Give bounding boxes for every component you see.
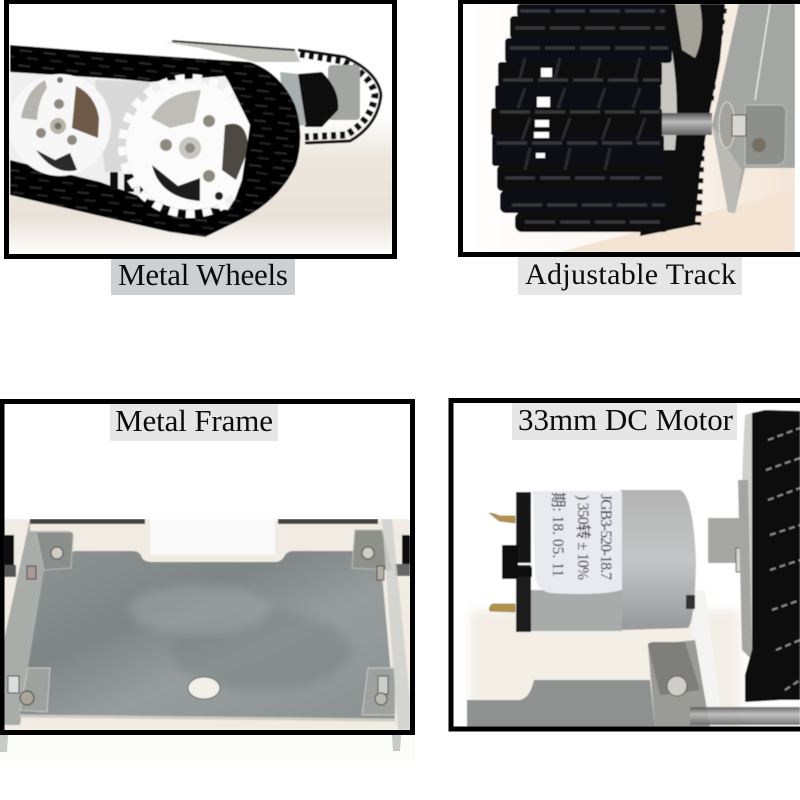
washer and bolt <box>719 102 735 148</box>
hole in plate <box>188 677 220 699</box>
motor sticker text: 期: 18. 05. 11 <box>549 492 567 577</box>
bottom track teeth <box>110 172 148 200</box>
label: adjustable track: Adjustable Track <box>525 258 736 291</box>
base plate <box>467 680 655 727</box>
border <box>451 400 800 729</box>
left wheel <box>9 74 111 176</box>
track tread rows <box>491 4 672 232</box>
border <box>460 2 800 254</box>
photo: frame plate from above <box>4 519 410 730</box>
photo: tank tracks and metal wheels <box>9 39 392 248</box>
rear motor <box>328 65 360 120</box>
rear toothed track <box>640 4 725 236</box>
chassis plate <box>165 42 300 62</box>
panel: metal wheels <box>6 2 394 295</box>
panel: metal frame <box>0 402 415 760</box>
corner brackets <box>36 532 73 570</box>
photo: motor mounted on frame <box>453 403 800 735</box>
axle <box>660 113 712 135</box>
bolts <box>51 547 63 559</box>
border <box>2 402 412 732</box>
gearbox cylinder <box>620 490 696 630</box>
photo: close-up of track and axle <box>463 4 795 252</box>
motor sticker text: JGB3-520-18.7 <box>597 494 614 580</box>
left glass panel <box>4 519 72 725</box>
tread highlights <box>497 11 668 222</box>
white gaps <box>534 68 552 158</box>
main plate <box>20 551 395 720</box>
right glass edge <box>382 519 410 730</box>
label: metal wheels: Metal Wheels <box>118 257 288 292</box>
right track curve <box>229 81 263 202</box>
legs below frame <box>0 735 401 752</box>
panel: 33mm dc motor <box>451 400 800 735</box>
output coupler <box>708 518 740 564</box>
track <box>745 410 800 702</box>
motor sticker text: ) 350转 ± 10% <box>574 495 592 580</box>
wheel behind track <box>659 50 678 151</box>
side glass plate <box>690 590 723 727</box>
gold terminals <box>489 513 515 523</box>
motor body <box>530 590 622 631</box>
motor sticker text <box>549 492 614 580</box>
far track <box>298 50 381 143</box>
inner wheel housing <box>10 72 250 210</box>
wheel side <box>742 412 755 660</box>
base fade below frame <box>0 735 415 760</box>
side strips <box>4 534 15 566</box>
black end cap <box>516 492 531 563</box>
panel: adjustable track <box>460 2 800 295</box>
right sprocket wheel <box>122 78 258 214</box>
side plate <box>712 4 795 213</box>
border <box>6 2 394 256</box>
label: metal frame: Metal Frame <box>115 403 273 438</box>
track outer <box>10 45 300 237</box>
label: 33mm dc motor: 33mm DC Motor <box>518 402 734 437</box>
axle <box>690 707 800 725</box>
